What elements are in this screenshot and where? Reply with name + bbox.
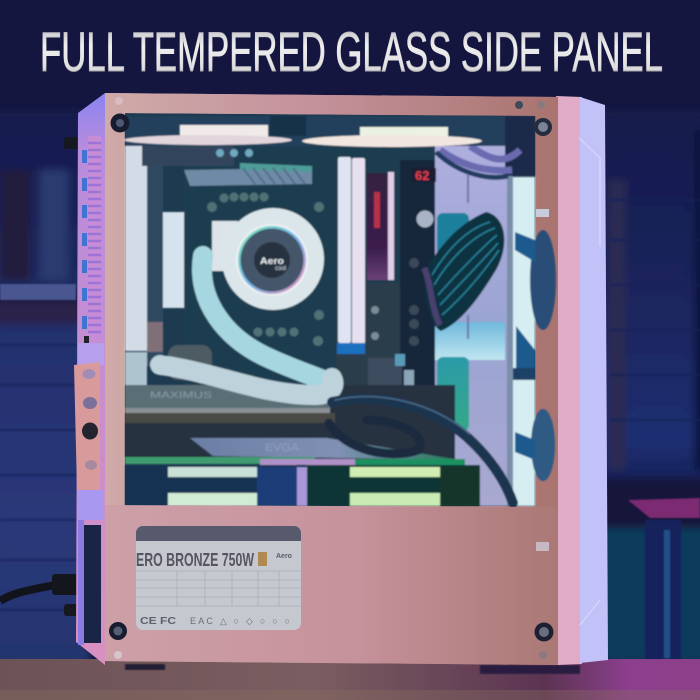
frame side label: lower [536, 542, 549, 551]
PSU label [136, 526, 301, 630]
window interior [124, 116, 556, 506]
POST code display [412, 168, 436, 183]
desk surface [0, 659, 700, 700]
POST code display: 62 [415, 168, 429, 183]
AIO coolant tubes [160, 256, 333, 395]
thumb screw: bottom left [109, 622, 127, 640]
cable bundle: upper [424, 212, 504, 331]
thumb screw: bottom right [534, 622, 554, 642]
background: side table [628, 498, 700, 660]
glass frame top band [105, 93, 558, 116]
RAM modules [337, 157, 394, 354]
PSU label: EAC △ ○ ◇ ○ ○ ○ [190, 616, 290, 626]
white bracket left [163, 212, 184, 308]
rear ventilation [88, 136, 101, 341]
frame side label: upper [536, 209, 549, 217]
PSU label: Aero [276, 553, 292, 560]
GPU: EVGA [265, 442, 300, 454]
top-right cables [436, 116, 535, 177]
power cable [0, 574, 86, 601]
top fans [124, 116, 505, 147]
GPU: MAXIMUS [150, 390, 212, 400]
white shroud left [125, 146, 147, 351]
PSU label: CE FC [140, 616, 176, 627]
CPU cooler pump [212, 208, 324, 310]
case: right front panel [556, 96, 608, 665]
motherboard [168, 146, 436, 391]
GPU [125, 385, 465, 465]
PSU label: ERO BRONZE 750W [136, 550, 254, 570]
bottom fans [125, 465, 480, 506]
CPU cooler pump: Aero [260, 256, 285, 266]
VRM heatsink [142, 146, 312, 186]
cable bundle: lower [329, 397, 513, 503]
right cable-management bracket [435, 146, 513, 506]
frame rivets [114, 97, 547, 659]
expansion slots [82, 150, 89, 348]
thumb screw: top left [110, 114, 130, 132]
PSU shroud [105, 505, 558, 665]
CPU cooler pump: cool [275, 266, 286, 272]
case: rear rubber feet [64, 137, 81, 616]
case: rear panel [74, 93, 105, 665]
PSU vent [84, 525, 101, 643]
case: tempered glass frame [105, 93, 558, 665]
rear IO bracket [74, 362, 100, 490]
background: brick mortar [0, 200, 700, 610]
right side fans [513, 177, 556, 506]
motherboard capacitor [416, 210, 434, 228]
thumb screw: top right [534, 118, 552, 136]
